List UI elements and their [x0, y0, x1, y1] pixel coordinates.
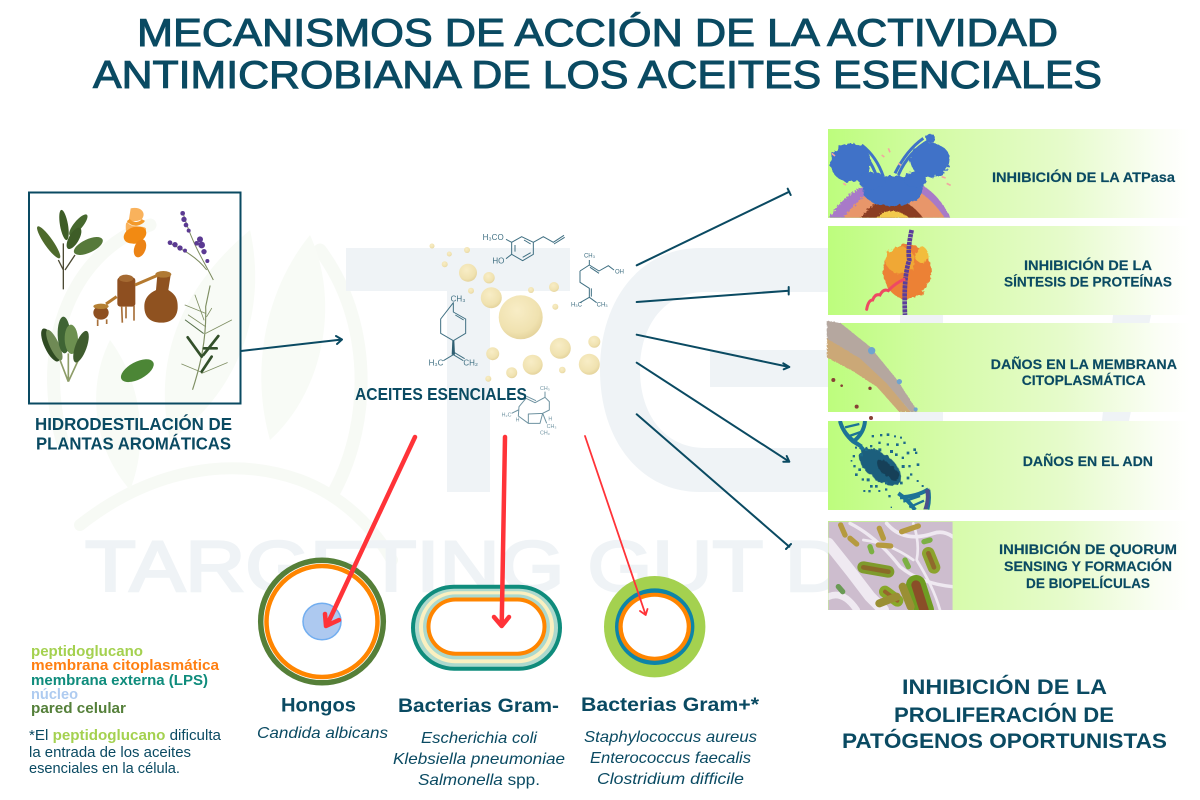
molecule: geraniol: CH₃	[584, 254, 596, 260]
title	[93, 12, 1102, 97]
arrow: plants to essential oils	[241, 336, 342, 351]
label: INHIBICIÓN DE LA	[1024, 256, 1152, 274]
debris speck	[869, 416, 873, 420]
molecule: limonene: CH₂	[463, 358, 478, 367]
label	[1004, 256, 1172, 291]
label: SÍNTESIS DE PROTEÍNAS	[1004, 274, 1172, 291]
conclusion heading: INHIBICIÓN DE LA	[902, 674, 1107, 699]
icon: lavender	[168, 211, 213, 280]
label	[999, 540, 1177, 592]
molecule: caryophyllene: CH₃	[540, 386, 550, 392]
arrow: to quorum sensing	[637, 414, 791, 549]
label: ACEITES ESENCIALES	[355, 384, 527, 404]
plant illustrations	[34, 208, 232, 389]
molecule: geraniol: CH₃	[597, 302, 608, 308]
diagram: fungal cell	[261, 560, 383, 683]
panel: ATPase inhibition	[828, 129, 1190, 218]
conclusion heading: PATÓGENOS OPORTUNISTAS	[842, 728, 1167, 753]
molecule: caryophyllene: CH₃	[540, 431, 550, 437]
label: DAÑOS EN EL ADN	[1023, 452, 1153, 470]
molecule: geraniol	[571, 254, 624, 308]
molecule: caryophyllene: H	[516, 417, 520, 423]
molecule: caryophyllene	[502, 386, 557, 437]
molecule: limonene: H₃C	[429, 358, 444, 367]
label: CITOPLASMÁTICA	[1022, 372, 1146, 389]
image: membrane	[827, 321, 918, 412]
molecule: eugenol: HO	[492, 256, 504, 265]
panel: cytoplasmic membrane damage	[827, 321, 1190, 412]
watermark: letter G	[600, 248, 830, 492]
label: gram-negative: Escherichia coli	[421, 730, 537, 747]
label	[991, 355, 1177, 389]
label: gram-negative: Salmonella spp.	[418, 772, 540, 789]
icon: orange peel	[121, 208, 149, 259]
molecules	[429, 233, 624, 437]
arrow: to cytoplasmic membrane	[637, 335, 789, 369]
legend: membrana externa (LPS)	[31, 672, 208, 689]
image: DNA fragmenting	[840, 421, 930, 510]
label: fungi: Hongos	[281, 694, 356, 716]
label: DE BIOPELÍCULAS	[1026, 575, 1150, 592]
label: PLANTAS AROMÁTICAS	[36, 432, 231, 454]
footnote: *El peptidoglucano dificulta	[29, 728, 222, 744]
label: gram-positive: Enterococcus faecalis	[590, 750, 751, 767]
molecule: geraniol: OH	[615, 270, 624, 276]
panel: DNA damage	[828, 421, 1190, 510]
molecule: limonene: CH₃	[451, 294, 465, 303]
icon: copper still	[93, 271, 178, 326]
label: SENSING Y FORMACIÓN	[1004, 557, 1172, 575]
molecule: geraniol: H₃C	[571, 302, 583, 308]
nucleus	[303, 603, 341, 640]
molecule: caryophyllene: H₂C	[502, 413, 512, 419]
background watermark	[54, 225, 1165, 607]
legend: peptidoglucano	[31, 643, 143, 660]
molecule: caryophyllene: CH₃	[547, 424, 557, 430]
molecule: eugenol	[483, 233, 565, 265]
watermark: leaf logo	[54, 225, 392, 560]
image: biofilm bacteria	[828, 522, 953, 610]
watermark: brand name: TARGETING GUT D	[85, 528, 845, 607]
label: gram-positive	[581, 694, 759, 788]
footnote: esenciales en la célula.	[29, 761, 180, 777]
arrow: to ATPase	[637, 189, 791, 265]
label: HIDRODESTILACIÓN DE	[35, 413, 232, 434]
legend: núcleo	[31, 686, 78, 703]
panel: protein synthesis inhibition	[828, 226, 1190, 315]
label: fungi	[257, 694, 388, 742]
icon: rosemary sprig	[182, 286, 232, 389]
red arrow: to fungi	[325, 437, 415, 626]
legend	[31, 643, 220, 717]
label: gram-positive: Clostridium difficile	[597, 771, 744, 788]
molecule: eugenol: H₃CO	[483, 233, 504, 242]
panel: quorum sensing and biofilm inhibition	[828, 521, 1190, 610]
droplets	[430, 244, 600, 382]
molecule: limonene	[429, 294, 478, 367]
image: ribosome	[867, 230, 931, 315]
arrow: to protein synthesis	[637, 287, 789, 302]
label: gram-negative	[393, 695, 565, 789]
label: gram-positive: Bacterias Gram+*	[581, 694, 759, 716]
arrow: to DNA	[637, 363, 789, 462]
image: ATPase	[828, 134, 951, 218]
footnote	[29, 728, 222, 777]
title: ANTIMICROBIANA DE LOS ACEITES ESENCIALES	[93, 54, 1102, 97]
label: INHIBICIÓN DE LA ATPasa	[992, 168, 1175, 186]
legend: pared celular	[31, 700, 126, 717]
conclusion heading	[842, 674, 1167, 753]
label: gram-positive: Staphylococcus aureus	[584, 729, 757, 746]
label	[35, 413, 232, 454]
panel: hydrodistillation of aromatic plants	[29, 192, 240, 454]
title: MECANISMOS DE ACCIÓN DE LA ACTIVIDAD	[137, 12, 1058, 55]
label: gram-negative: Bacterias Gram-	[398, 695, 559, 717]
molecule: caryophyllene: H	[548, 417, 552, 423]
diagram: gram-positive bacterium	[604, 576, 705, 677]
label: gram-negative: Klebsiella pneumoniae	[393, 751, 565, 768]
panel: essential oils	[355, 233, 624, 437]
red arrow: to gram-positive	[585, 436, 648, 615]
conclusion heading: PROLIFERACIÓN DE	[894, 702, 1114, 727]
watermark: other letters	[900, 248, 1165, 492]
watermark: letter T	[346, 248, 570, 492]
label: DAÑOS EN LA MEMBRANA	[991, 355, 1177, 373]
diagram: gram-negative bacterium	[411, 585, 562, 671]
footnote: la entrada de los aceites	[29, 745, 191, 761]
red arrow: to gram-negative	[494, 437, 509, 626]
label: INHIBICIÓN DE QUORUM	[999, 540, 1177, 558]
icon: sage bunch	[37, 316, 92, 382]
legend: membrana citoplasmática	[31, 657, 220, 674]
label: fungi: Candida albicans	[257, 725, 388, 742]
icon: sage sprig	[34, 209, 105, 289]
icon: single leaf	[117, 355, 157, 387]
